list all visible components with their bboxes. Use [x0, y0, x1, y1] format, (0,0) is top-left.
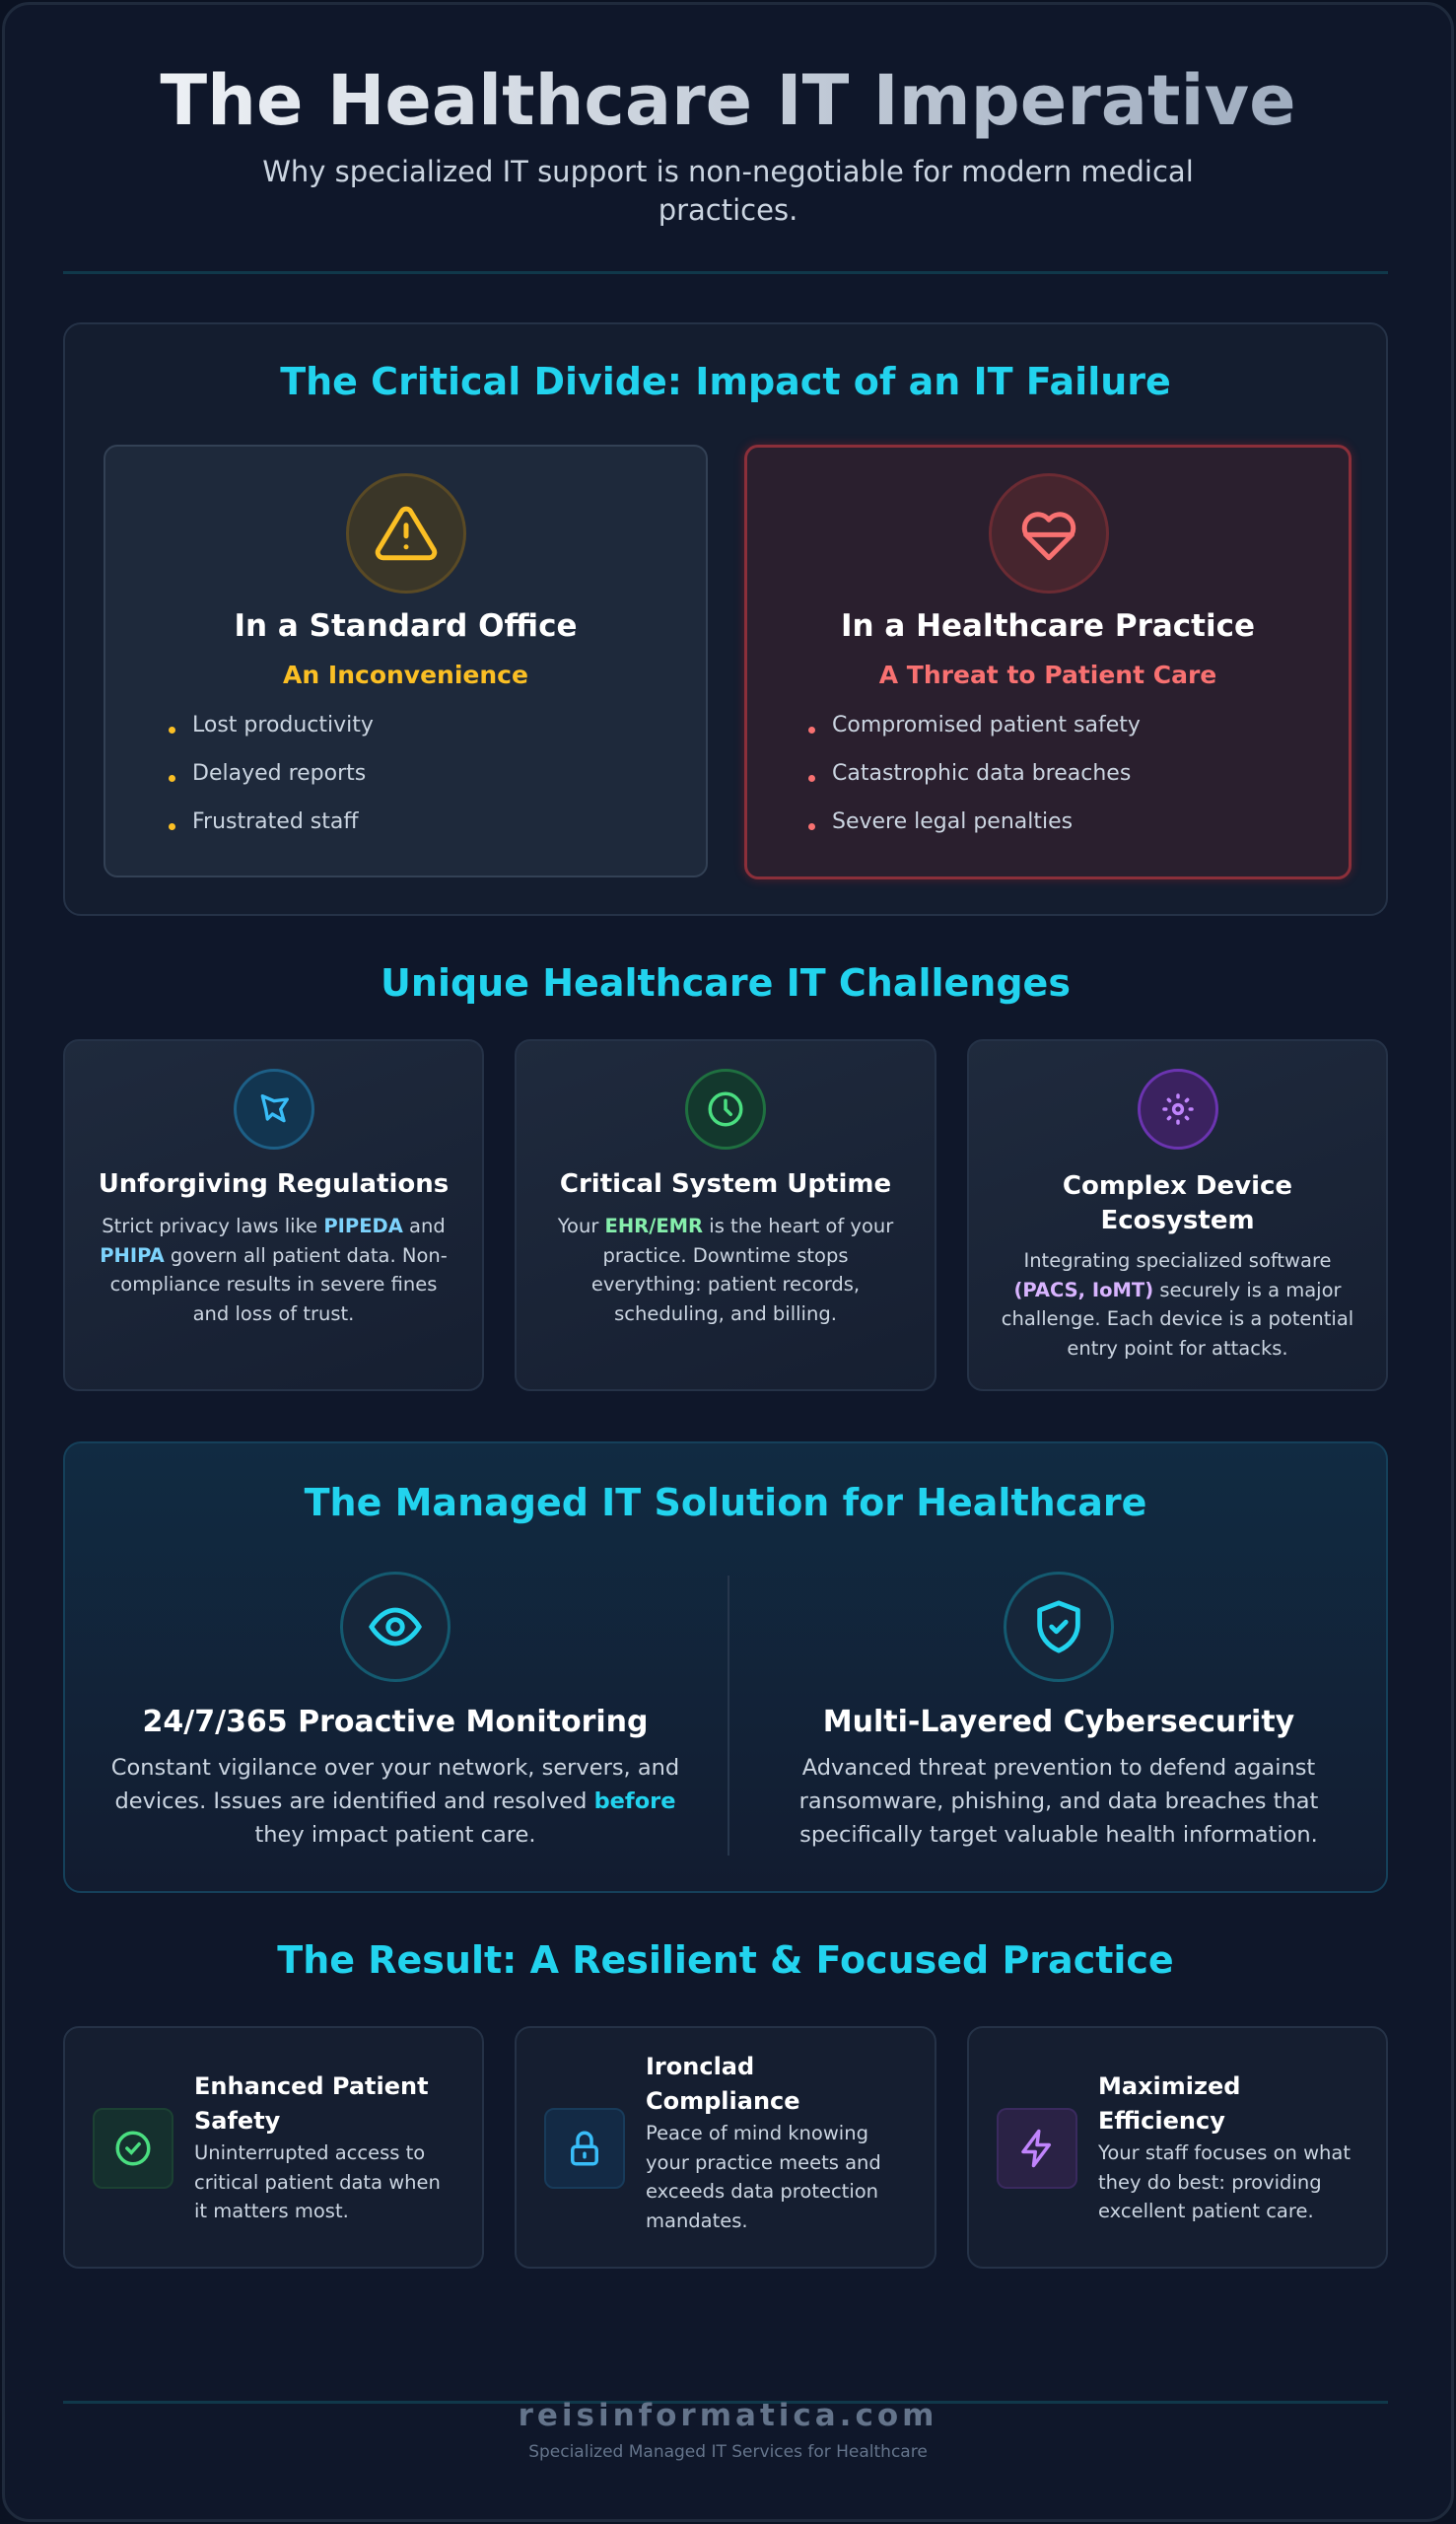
- heading: result: The Result: A Resilient & Focused Practice: [277, 1938, 1174, 1982]
- text: [1098, 2072, 1351, 2222]
- body: Your EHR/EMR is the heart of your practice. Downtime stops everything: patient records, scheduling, and billing.: [558, 1215, 893, 1325]
- text: Enhanced Patient Safety: [194, 2072, 429, 2135]
- title: The Healthcare IT Imperative: [160, 60, 1296, 141]
- card title: In a Healthcare Practice: [841, 608, 1255, 644]
- bullet list: Delayed reports: [192, 761, 366, 786]
- subtitle: Why specialized IT support is non-negotiable for modern medical practices.: [262, 155, 1194, 227]
- icon: bolt: [997, 2108, 1077, 2189]
- title: Multi-Layered Cybersecurity: [823, 1705, 1294, 1739]
- footer brand: reisinformatica.com: [519, 2398, 937, 2433]
- bullet list: Compromised patient safety: [832, 713, 1141, 737]
- title: Unforgiving Regulations: [99, 1169, 449, 1199]
- title: Critical System Uptime: [560, 1169, 891, 1199]
- text: [646, 2053, 881, 2232]
- title: [1063, 1171, 1292, 1235]
- text: Uninterrupted access to critical patient data when it matters most.: [194, 2141, 441, 2222]
- card subtitle: A Threat to Patient Care: [879, 661, 1216, 689]
- panel: managed IT solution: [63, 1441, 1388, 1893]
- title: 24/7/365 Proactive Monitoring: [143, 1705, 648, 1739]
- body: Integrating specialized software (PACS, IoMT) securely is a major challenge. Each device is a potential entry point for attacks.: [1002, 1249, 1353, 1359]
- icon: shield: [1004, 1572, 1114, 1682]
- bullet list: [808, 713, 1141, 834]
- text: Ironclad Compliance: [646, 2053, 800, 2115]
- card: healthcare practice: [744, 445, 1352, 879]
- bullet list: Severe legal penalties: [832, 809, 1073, 834]
- icon: regulations: [234, 1069, 314, 1150]
- text: Your staff focuses on what they do best: providing excellent patient care.: [1098, 2141, 1351, 2222]
- result card: safety: [63, 2026, 484, 2269]
- bullet list: [169, 713, 374, 834]
- bullet list: Frustrated staff: [192, 809, 359, 834]
- title: Ecosystem: [1100, 1206, 1255, 1235]
- icon: eye: [340, 1572, 451, 1682]
- text: Peace of mind knowing your practice meets and exceeds data protection mandates.: [646, 2122, 881, 2232]
- card subtitle: An Inconvenience: [283, 661, 528, 689]
- heading: critical divide: The Critical Divide: Impact of an IT Failure: [280, 360, 1171, 403]
- solution: monitoring: [111, 1572, 679, 1848]
- title: Complex Device: [1063, 1171, 1292, 1201]
- icon: clock: [685, 1069, 766, 1150]
- result card: compliance: [515, 2026, 936, 2269]
- result card: efficiency: [967, 2026, 1388, 2269]
- card: regulations: [63, 1039, 484, 1391]
- footer tagline: Specialized Managed IT Services for Healthcare: [528, 2442, 928, 2462]
- card: devices: [967, 1039, 1388, 1391]
- icon: devices: [1138, 1069, 1218, 1150]
- card title: In a Standard Office: [235, 608, 577, 644]
- icon: lock: [544, 2108, 625, 2189]
- body: Advanced threat prevention to defend against ransomware, phishing, and data breaches that specifically target valuable health information.: [799, 1755, 1318, 1848]
- icon: heart: [989, 473, 1109, 594]
- heading: solution: The Managed IT Solution for Healthcare: [305, 1481, 1146, 1524]
- icon: check: [93, 2108, 173, 2189]
- body: Strict privacy laws like PIPEDA and PHIPA govern all patient data. Non-compliance results in severe fines and loss of trust.: [100, 1215, 448, 1325]
- icon: warning: [346, 473, 466, 594]
- text: [194, 2072, 441, 2222]
- card: uptime: [515, 1039, 936, 1391]
- solution: cybersecurity: [799, 1572, 1318, 1848]
- card: standard office: [104, 445, 708, 877]
- body: Constant vigilance over your network, servers, and devices. Issues are identified and resolved before they impact patient care.: [111, 1755, 679, 1848]
- bullet list: Lost productivity: [192, 713, 374, 737]
- bullet list: Catastrophic data breaches: [832, 761, 1131, 786]
- text: Maximized Efficiency: [1098, 2072, 1240, 2135]
- panel: critical divide: [63, 322, 1388, 916]
- title: [0, 51, 1456, 150]
- heading: challenges: Unique Healthcare IT Challenges: [381, 961, 1071, 1005]
